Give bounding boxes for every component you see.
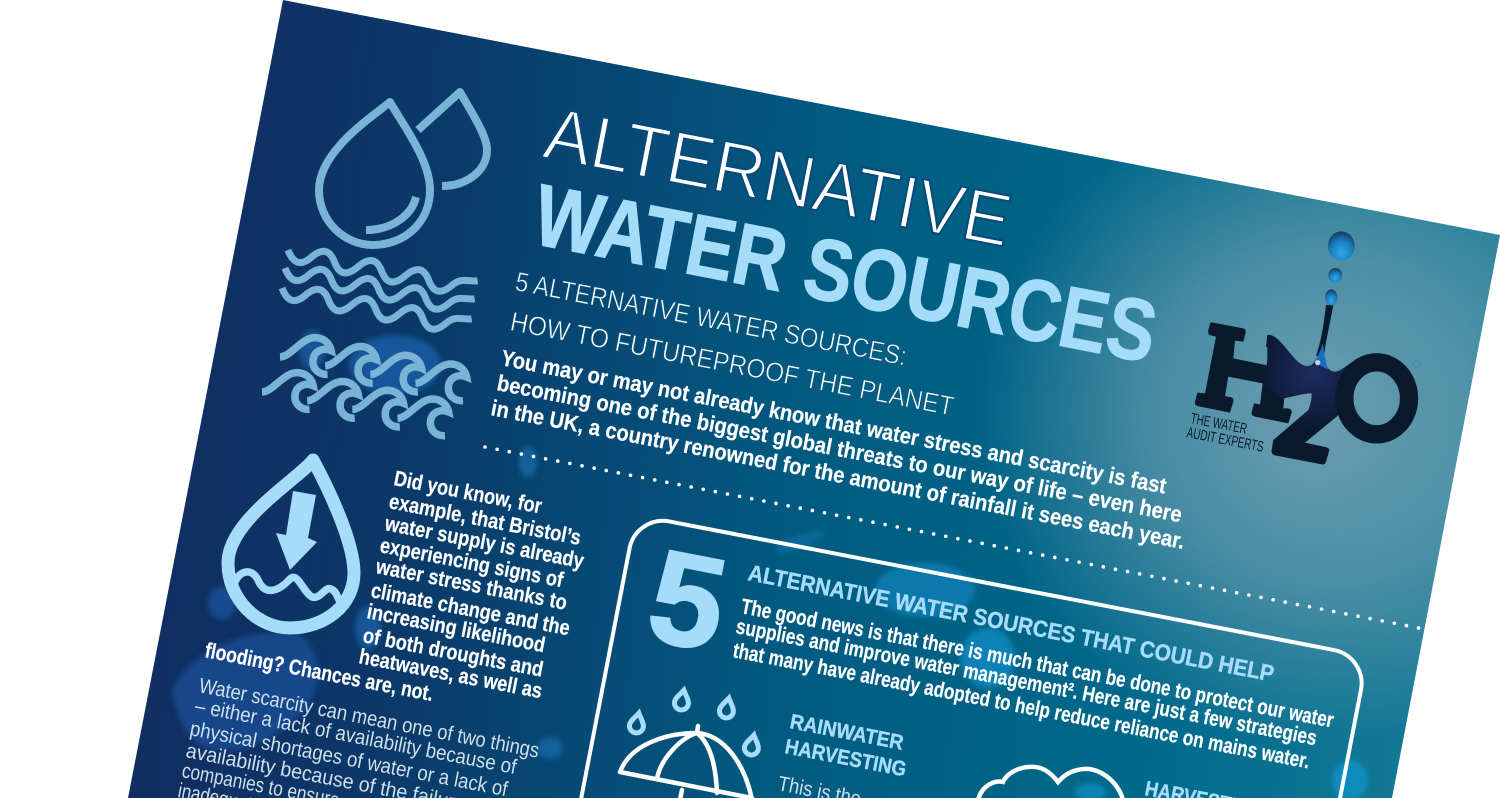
text: water scarcity xyxy=(176,674,541,798)
icon: cloud xyxy=(978,767,1123,798)
big number 5: 5 xyxy=(638,521,738,679)
text: Did you know: experiencing signs of xyxy=(378,533,566,592)
text: Did you know: water stress thanks to xyxy=(373,554,569,615)
logo: H2O The Water Audit Experts xyxy=(1185,231,1420,464)
dotted divider xyxy=(485,447,1424,629)
icon: water drops xyxy=(319,92,487,245)
panel heading: ALTERNATIVE WATER SOURCES THAT COULD HELP xyxy=(746,559,1276,687)
icon: drop with falling level xyxy=(228,460,354,628)
rainwater harvesting heading xyxy=(783,710,908,781)
text: Did you know: heatwaves, as well as xyxy=(357,644,544,703)
logo: H2O The Water Audit Experts: AUDIT EXPERTS xyxy=(1185,424,1265,456)
water splash decoration xyxy=(172,330,1368,798)
title xyxy=(526,91,1164,382)
panel intro text: The good news is that there is much that can be done to protect our water xyxy=(739,594,1336,733)
text: Did you know: flooding? Chances are, not. xyxy=(203,638,435,706)
subtitle: HOW TO FUTUREPROOF THE PLANET xyxy=(508,306,956,422)
intro text: You may or may not already know that water stress and scarcity is fast xyxy=(499,345,1169,499)
panel intro text: that many have already adopted to help reduce reliance on mains water. xyxy=(731,638,1312,773)
text: Did you know: Did you know, for xyxy=(392,466,544,519)
icon: wavy lines xyxy=(280,244,478,336)
rainwater harvesting heading: HARVESTING xyxy=(783,735,908,781)
icon: umbrella with rain xyxy=(620,689,761,798)
title: WATER SOURCES xyxy=(526,166,1164,382)
rainwater harvesting heading: RAINWATER xyxy=(788,710,905,755)
text: Did you know xyxy=(203,466,586,706)
text: Did you know: increasing likelihood xyxy=(365,599,547,657)
panel: 5 alternative water sources xyxy=(522,515,1367,798)
text: water scarcity: – either a lack of availability because of xyxy=(193,694,519,779)
title: ALTERNATIVE xyxy=(538,91,1018,263)
subtitle: 5 ALTERNATIVE WATER SOURCES: xyxy=(513,266,909,371)
text: Did you know: water supply is already xyxy=(382,511,586,573)
text: Did you know: of both droughts and xyxy=(361,623,545,682)
icon: curling waves xyxy=(260,331,470,436)
text: Did you know: climate change and the xyxy=(369,578,572,640)
logo: H2O The Water Audit Experts: THE WATER xyxy=(1189,410,1249,438)
intro text: in the UK, a country renowned for the amount of rainfall it sees each year. xyxy=(489,395,1187,554)
intro text: becoming one of the biggest global threats to our way of life – even here xyxy=(495,370,1184,527)
text: water scarcity: Water scarcity can mean one of two things xyxy=(197,674,541,763)
panel intro text: supplies and improve water management². Here are just a few strategies xyxy=(734,614,1319,750)
text: Did you know: example, that Bristol’s xyxy=(387,489,583,550)
